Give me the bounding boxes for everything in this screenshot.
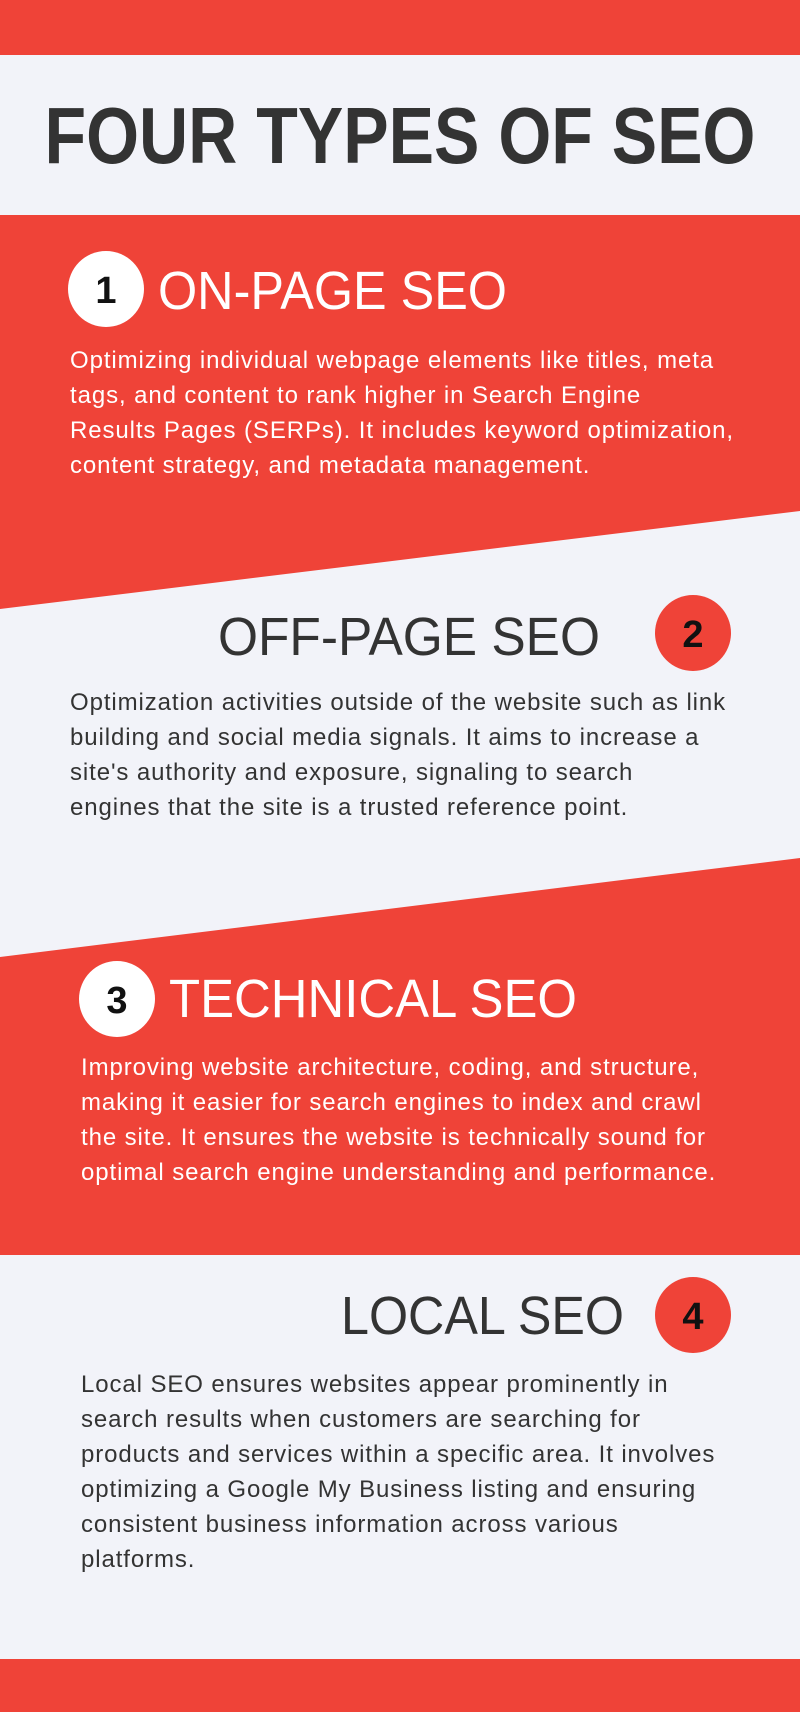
bottom red bar (0, 1659, 800, 1712)
text: on-page description: Results Pages (SERPs). It includes keyword optimization, (70, 417, 734, 444)
text: local description: optimizing a Google My Business listing and ensuring (81, 1476, 696, 1503)
panel: off-page content (70, 595, 731, 821)
icon: number 4 circle: 4 (682, 1296, 704, 1338)
icon: number 2 circle (655, 595, 731, 671)
panel: on-page content (68, 251, 734, 479)
text: local description: platforms. (81, 1546, 195, 1573)
top red bar (0, 0, 800, 55)
text: on-page description: content strategy, and metadata management. (70, 452, 590, 479)
text: technical description: optimal search engine understanding and performance. (81, 1159, 716, 1186)
text: off-page description: engines that the site is a trusted reference point. (70, 794, 628, 821)
text: local description: products and services within a specific area. It involves (81, 1441, 715, 1468)
icon: number 4 circle (655, 1277, 731, 1353)
heading: local seo: LOCAL SEO (341, 1286, 624, 1346)
icon: number 3 circle (79, 961, 155, 1037)
heading: on-page seo: ON-PAGE SEO (158, 261, 507, 321)
text: off-page description: site's authority and exposure, signaling to search (70, 759, 633, 786)
icon: number 3 circle: 3 (106, 980, 128, 1022)
panel: technical content (79, 961, 716, 1186)
heading: off-page seo: OFF-PAGE SEO (218, 607, 600, 667)
panel: technical red band (0, 858, 800, 1255)
text: off-page description: Optimization activities outside of the website such as link (70, 689, 726, 716)
text: on-page description: Optimizing individual webpage elements like titles, meta (70, 347, 714, 374)
icon: number 1 circle (68, 251, 144, 327)
text: technical description: making it easier for search engines to index and crawl (81, 1089, 702, 1116)
text: technical description: Improving website architecture, coding, and structure, (81, 1054, 699, 1081)
text: off-page description: building and social media signals. It aims to increase a (70, 724, 699, 751)
panel: on-page red band (0, 215, 800, 609)
text: technical description: the site. It ensures the website is technically sound for (81, 1124, 706, 1151)
text: local description: search results when customers are searching for (81, 1406, 641, 1433)
text: on-page description: tags, and content to rank higher in Search Engine (70, 382, 641, 409)
text: local description: Local SEO ensures websites appear prominently in (81, 1371, 668, 1398)
text: local description: consistent business information across various (81, 1511, 619, 1538)
heading: technical seo: TECHNICAL SEO (169, 969, 577, 1029)
icon: number 1 circle: 1 (95, 270, 117, 312)
panel: local content (81, 1277, 731, 1573)
icon: number 2 circle: 2 (682, 614, 704, 656)
